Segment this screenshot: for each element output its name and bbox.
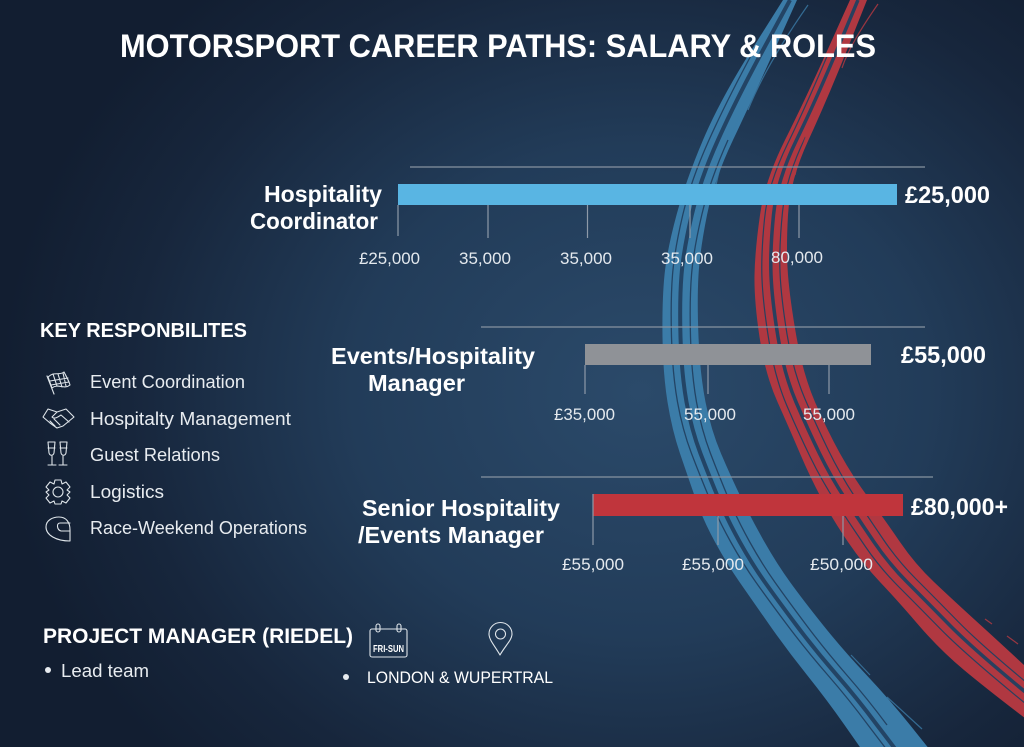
role label: Manager	[368, 370, 465, 396]
text: guest relations: Guest Relations	[90, 445, 220, 465]
text: race-weekend operations: Race-Weekend Operations	[90, 518, 307, 538]
icon: gear	[46, 480, 70, 504]
axis labels: 35,000	[560, 249, 612, 268]
bullet: lead team: Lead team	[61, 661, 149, 681]
icon: handshake	[43, 409, 74, 428]
icon: calendar: FRI-SUN	[373, 644, 404, 655]
blue track stripe	[662, 0, 930, 747]
bar	[398, 184, 897, 205]
ticks	[398, 205, 799, 238]
row: Events/Hospitality Manager	[331, 327, 986, 424]
axis labels: £55,000	[562, 555, 624, 574]
ticks	[593, 494, 843, 545]
panel: key responsibilities	[40, 320, 307, 541]
salary value: £25,000	[905, 182, 990, 209]
bullet: location: LONDON & WUPERTRAL	[367, 669, 553, 687]
icon: chequered flag	[47, 372, 70, 394]
axis labels: £35,000	[554, 405, 615, 424]
role label	[358, 495, 560, 548]
axis labels: 80,000	[771, 248, 823, 267]
bar	[585, 344, 871, 365]
row: Hospitality Coordinator	[250, 167, 990, 268]
axis labels: £25,000	[359, 249, 420, 268]
axis labels	[359, 248, 823, 268]
icon: helmet	[46, 517, 70, 541]
heading: PROJECT MANAGER (RIEDEL)	[43, 625, 353, 648]
ticks	[585, 365, 829, 394]
icon: map pin	[489, 622, 512, 655]
title: MOTORSPORT CAREER PATHS: SALARY & ROLES	[120, 28, 876, 64]
axis labels: 35,000	[661, 249, 713, 268]
salary value: £80,000+	[911, 494, 1008, 521]
icon: glasses	[48, 442, 67, 465]
axis labels: 35,000	[459, 249, 511, 268]
role label: Hospitality	[264, 181, 382, 207]
text: event coordination: Event Coordination	[90, 372, 245, 392]
icon: calendar	[370, 624, 407, 657]
axis labels: £50,000	[810, 555, 873, 574]
text: logistics: Logistics	[90, 482, 164, 502]
axis labels	[562, 555, 873, 574]
role label: Coordinator	[250, 208, 378, 234]
bar	[593, 494, 903, 516]
panel: project manager	[43, 622, 553, 687]
axis labels: £55,000	[682, 555, 744, 574]
heading: KEY RESPONBILITES	[40, 320, 247, 342]
salary value: £55,000	[901, 342, 986, 369]
role label	[250, 181, 382, 234]
axis labels	[554, 405, 855, 424]
axis labels: 55,000	[684, 405, 736, 424]
role label	[331, 343, 535, 396]
role label: Events/Hospitality	[331, 343, 535, 369]
axis labels: 55,000	[803, 405, 855, 424]
text: hospitality management: Hospitalty Management	[90, 409, 291, 429]
role label: Senior Hospitality	[362, 495, 560, 521]
red track stripe	[754, 0, 1024, 722]
role label: /Events Manager	[358, 522, 544, 548]
row: Senior Hospitality /Events Manager	[358, 477, 1008, 574]
